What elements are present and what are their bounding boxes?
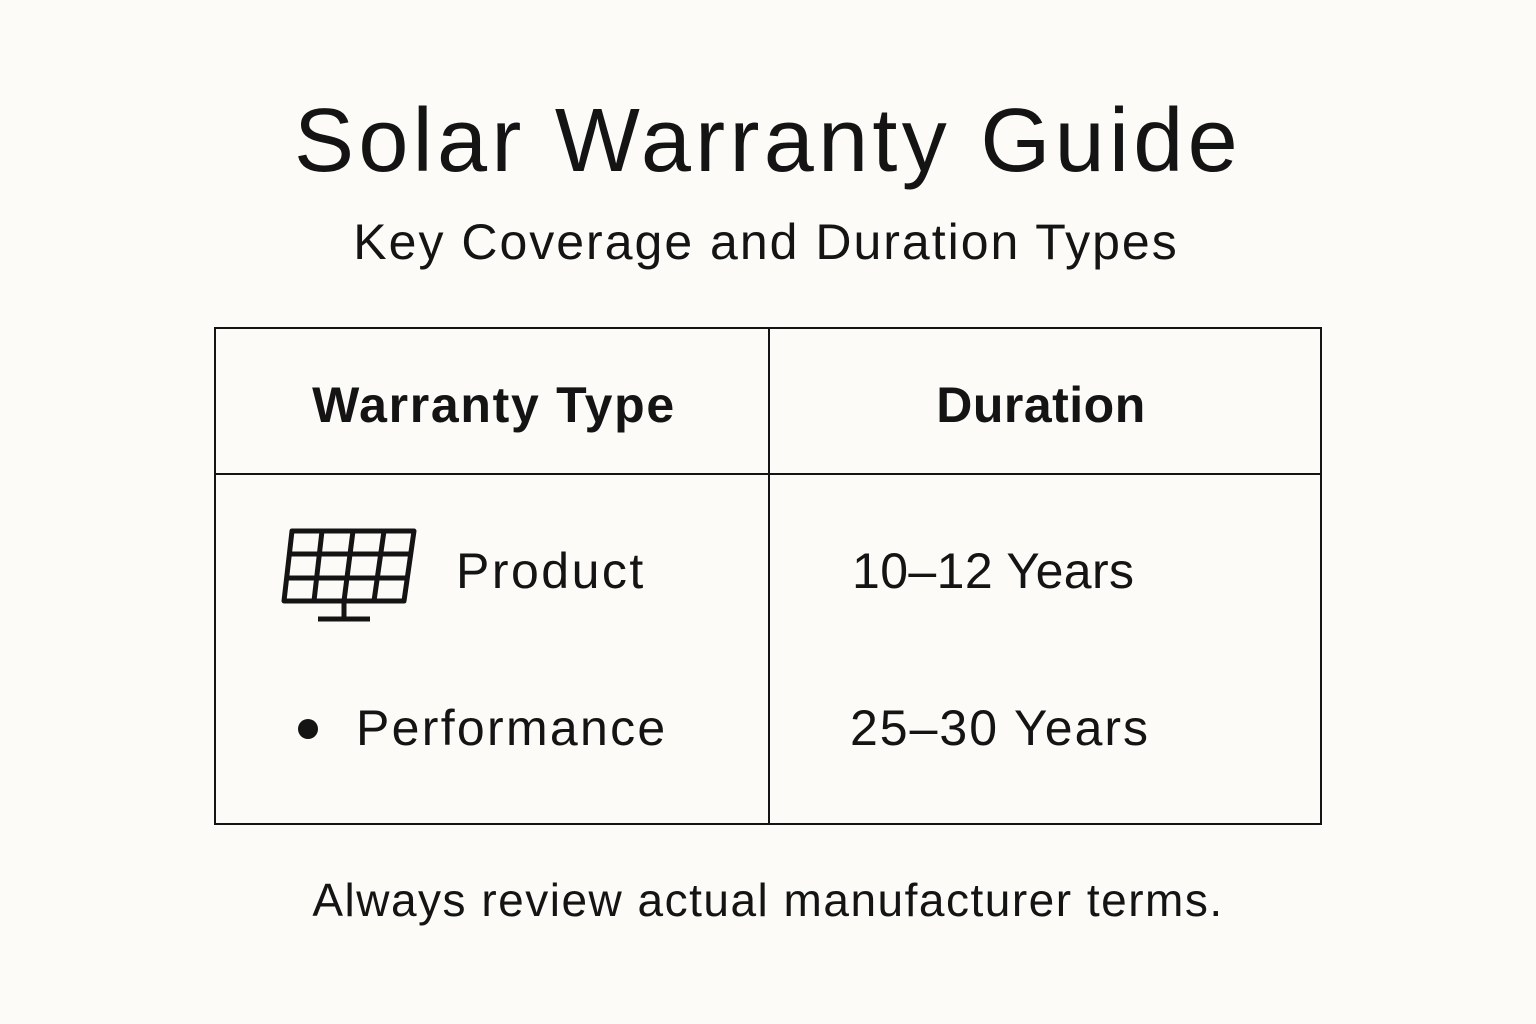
bullet <box>298 719 318 739</box>
header: warranty type: Warranty Type <box>312 377 676 433</box>
header divider <box>216 473 1320 475</box>
row: product duration: 10–12 Years <box>852 543 1134 599</box>
header: duration: Duration <box>936 377 1146 433</box>
icon: solar panel <box>282 528 416 622</box>
table <box>214 327 1322 825</box>
title: Solar Warranty Guide <box>294 91 1242 191</box>
row: performance duration: 25–30 Years <box>850 700 1150 756</box>
footer note: Always review actual manufacturer terms. <box>312 874 1224 926</box>
row: product: Product <box>456 543 646 599</box>
column divider <box>768 329 770 823</box>
subtitle: Key Coverage and Duration Types <box>353 214 1179 270</box>
row: performance: Performance <box>356 700 668 756</box>
